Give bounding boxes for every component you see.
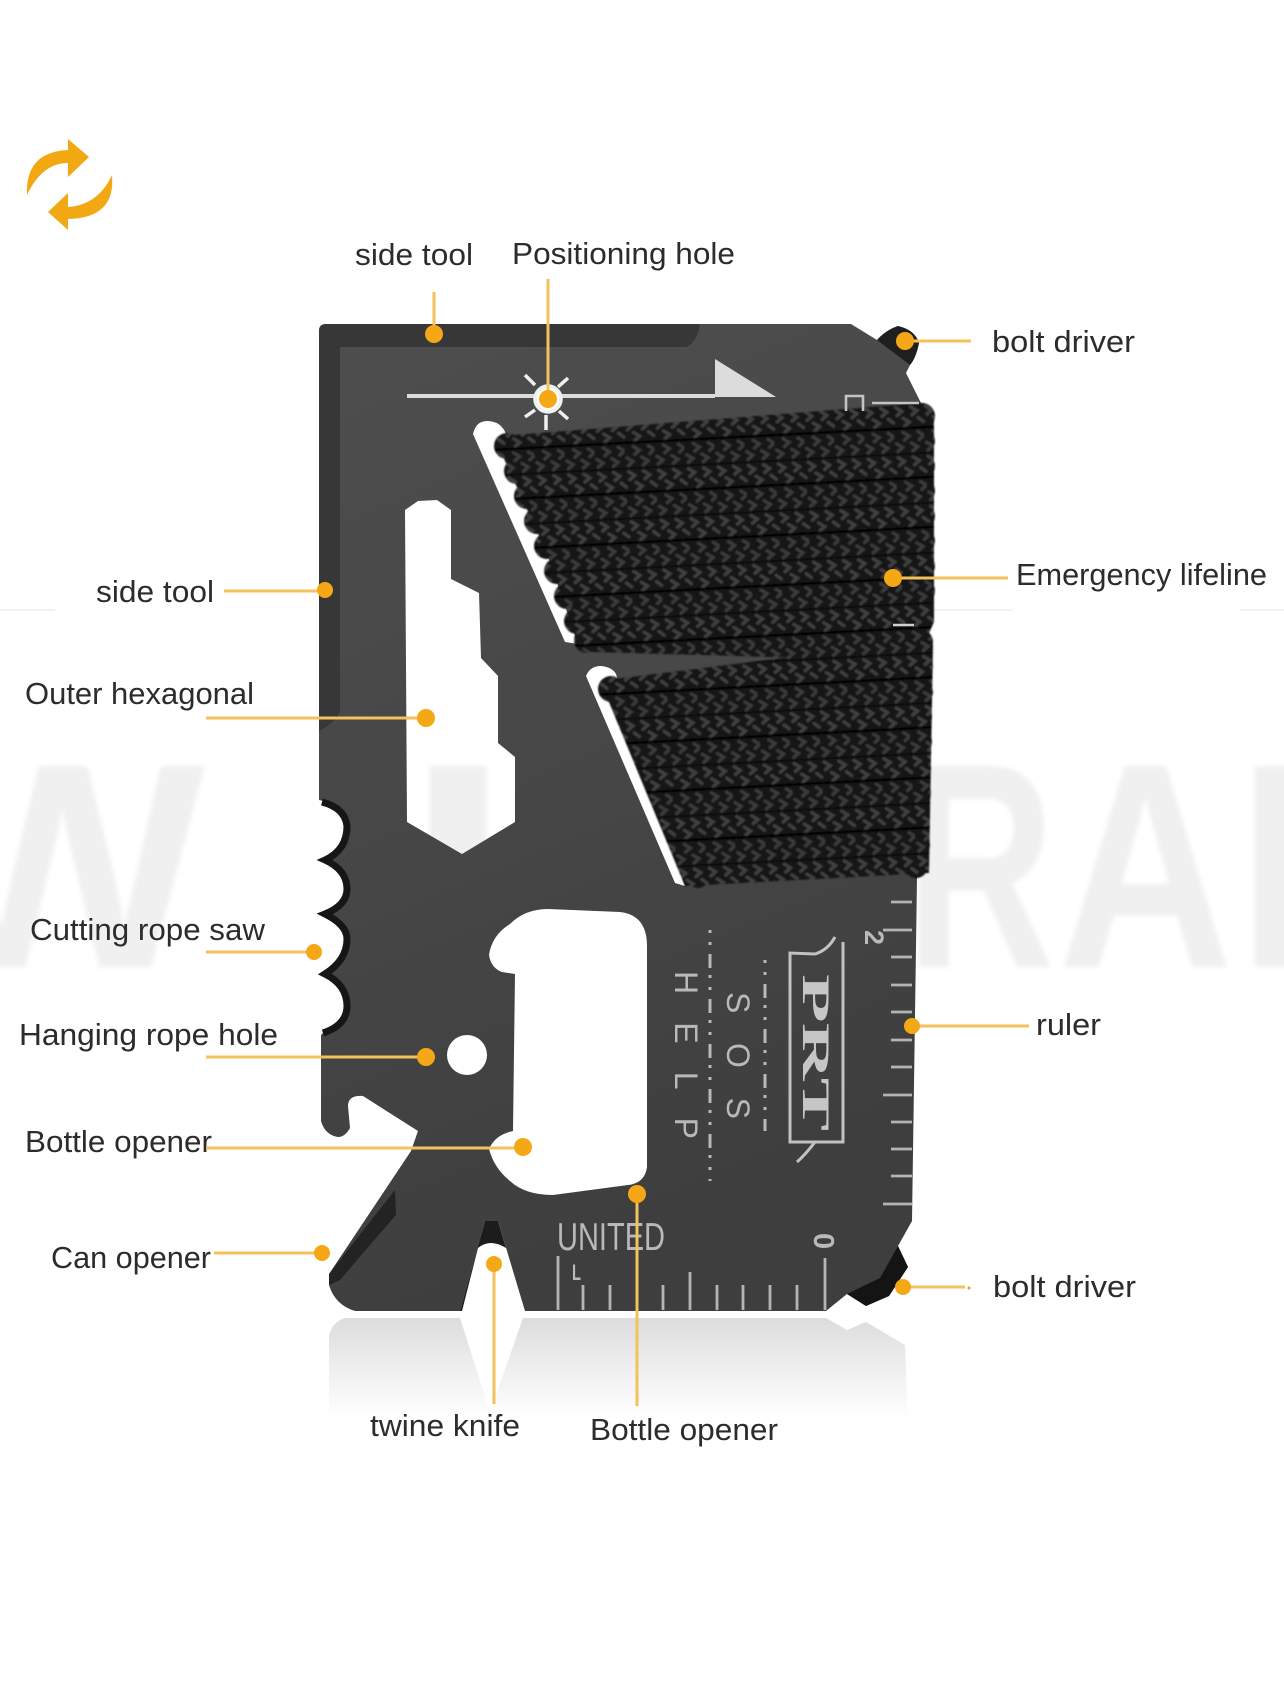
callout: positioning hole: Positioning hole	[512, 236, 735, 271]
callout: bottle opener bottom: Bottle opener	[590, 1412, 778, 1447]
callout: left side tool: side tool	[96, 574, 214, 609]
callout: bottle opener left: Bottle opener	[25, 1124, 212, 1159]
callout: top bolt driver	[896, 324, 1135, 359]
engraved arrow	[407, 359, 776, 398]
callout: bottle opener left	[25, 1124, 532, 1159]
background watermark letters: I	[403, 703, 513, 1029]
callout: can opener: Can opener	[51, 1240, 211, 1275]
callout: outer hexagonal: Outer hexagonal	[25, 676, 254, 711]
engraved HELP: HELP	[668, 971, 704, 1139]
callout: emergency lifeline	[884, 557, 1267, 592]
saw teeth shading	[322, 802, 347, 1033]
icon: orange refresh arrows	[27, 139, 112, 230]
engraved PRT banner	[790, 937, 843, 1162]
can opener shading	[329, 1190, 396, 1285]
callout: emergency lifeline: Emergency lifeline	[1016, 557, 1267, 592]
ruler ticks on bottom edge	[558, 1256, 825, 1310]
multitool card	[319, 324, 935, 1311]
rope: upper winding	[494, 403, 935, 660]
rope: lower winding	[598, 629, 933, 888]
engraved UNITED: UNITED	[557, 1216, 665, 1259]
callout: ruler	[904, 1007, 1101, 1042]
callout: positioning hole	[512, 236, 735, 408]
callout: hanging rope hole	[19, 1017, 435, 1066]
twine knife notch shading	[460, 1221, 506, 1311]
engraved PRT banner: PRT	[794, 974, 837, 1131]
callout: left side tool	[96, 574, 333, 609]
callout: bottle opener bottom	[590, 1185, 778, 1447]
positioning hole glow	[525, 375, 568, 430]
engraved SOS: SOS	[720, 992, 756, 1119]
callout: ruler: ruler	[1036, 1007, 1101, 1042]
ruler number 1: L	[572, 1260, 581, 1285]
top bolt driver tip	[877, 326, 919, 365]
card metal body with cut-outs	[319, 324, 923, 1311]
callout: can opener	[51, 1240, 330, 1275]
callout: cutting rope saw	[30, 912, 322, 960]
engraved dotted lines	[710, 930, 765, 1181]
callout: bottom bolt driver: bolt driver	[993, 1269, 1136, 1304]
callout: hanging rope hole: Hanging rope hole	[19, 1017, 278, 1052]
side tool bevels	[319, 324, 700, 731]
ruler ticks on right edge	[883, 902, 912, 1204]
card floor reflection	[329, 1318, 908, 1420]
engraved top ruler mark	[846, 396, 919, 411]
callout: outer hexagonal	[25, 676, 435, 727]
bottom bolt driver tip	[847, 1246, 908, 1306]
ruler number 2: 2	[859, 930, 889, 945]
callout: cutting rope saw: Cutting rope saw	[30, 912, 266, 947]
callout: top side tool: side tool	[355, 237, 473, 272]
background watermark letters: A	[1058, 703, 1233, 1029]
ruler number 0: 0	[807, 1233, 839, 1249]
background watermark letters: R	[905, 703, 1055, 1029]
callout: bottom bolt driver	[895, 1269, 1136, 1304]
callout: top side tool	[355, 237, 473, 343]
background watermark letters	[0, 703, 1284, 1029]
callout: twine knife	[370, 1256, 520, 1443]
callout: twine knife: twine knife	[370, 1408, 520, 1443]
callout: top bolt driver: bolt driver	[992, 324, 1135, 359]
